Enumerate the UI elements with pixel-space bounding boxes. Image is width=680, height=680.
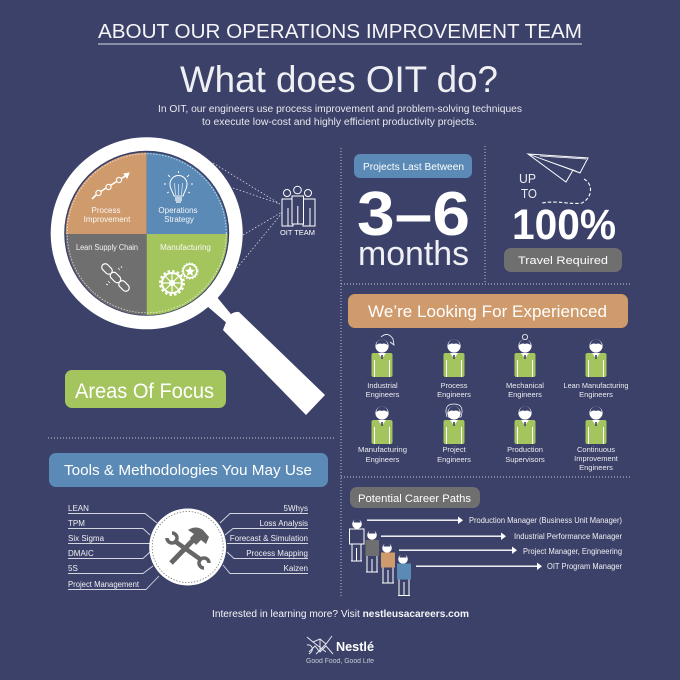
text: up to: TO (521, 186, 537, 201)
text: up to (519, 171, 537, 201)
icon: OIT team (280, 186, 315, 237)
quadrant: manufacturing: Manufacturing (160, 243, 211, 252)
icon: OIT team: OIT TEAM (280, 228, 315, 237)
panel: travel (504, 154, 622, 272)
text: up to: UP (519, 171, 536, 186)
right tool labels: 5Whys (284, 504, 308, 513)
career labels: Production Manager (Business Unit Manager) (469, 516, 622, 525)
quadrant: process improvement (66, 152, 147, 234)
footer call to action: Interested in learning more? Visit nestleusacareers.com (212, 609, 469, 620)
quadrant: lean supply chain (66, 234, 147, 315)
panel: tools and methodologies (49, 453, 328, 590)
right tool labels: Process Mapping (246, 549, 308, 558)
right tool labels: Forecast & Simulation (230, 534, 308, 543)
right tool labels: Loss Analysis (260, 519, 308, 528)
engineer: production supervisors: Supervisors (505, 455, 545, 464)
engineer: lean manufacturing: Engineers (579, 390, 613, 399)
left tool labels: Project Management (68, 580, 140, 589)
heading pill: looking for experienced: We’re Looking For Experienced (368, 302, 607, 321)
icon: paper plane (528, 154, 591, 203)
engineer: project: Project (442, 445, 467, 454)
pill: projects last between: Projects Last Between (363, 162, 464, 173)
engineer: manufacturing: Manufacturing (358, 445, 407, 454)
engineer: lean manufacturing (564, 339, 628, 399)
career labels: OIT Program Manager (547, 562, 622, 571)
title: ABOUT OUR OPERATIONS IMPROVEMENT TEAM (98, 21, 582, 43)
career labels (469, 516, 622, 571)
quadrant: manufacturing (147, 234, 228, 315)
panel: career paths (350, 487, 622, 596)
heading pill: tools (49, 453, 328, 487)
left tool labels (68, 504, 140, 589)
number: 100%: 100% (512, 201, 616, 249)
intro text: In OIT, our engineers use process improvement and problem-solving techniques (158, 104, 522, 115)
heading pill: looking for experienced (348, 294, 628, 328)
number: 3-6: 3–6 (357, 180, 470, 249)
engineer: mechanical (506, 334, 544, 399)
engineer: industrial: Industrial (367, 381, 398, 390)
label: areas of focus (65, 370, 226, 408)
heading pill: tools: Tools & Methodologies You May Use (64, 462, 312, 479)
icon: rising chart line (92, 173, 129, 199)
Nestlé logo: Good Food, Good Life (306, 658, 374, 665)
heading: What does OIT do: What does OIT do? (180, 59, 498, 100)
icon: nest (307, 636, 333, 654)
dotted connectors to OIT team (213, 163, 282, 268)
engineer: project: Engineers (437, 455, 471, 464)
text: months: months (358, 235, 469, 273)
engineer: mechanical: Engineers (508, 390, 542, 399)
panel: project duration (354, 154, 472, 273)
intro text (158, 104, 522, 128)
lens ring (51, 137, 243, 329)
icon: light bulb (164, 171, 193, 202)
quadrant: operations strategy: Operations (158, 206, 198, 215)
career arrows (367, 516, 542, 570)
right tool labels: Kaizen (284, 564, 308, 573)
engineer: production supervisors: Production (507, 445, 543, 454)
magnifier handle (207, 296, 325, 415)
left tool labels: Six Sigma (68, 534, 105, 543)
career labels: Project Manager, Engineering (523, 547, 622, 556)
engineer: continuous improvement: Engineers (579, 463, 613, 472)
engineer: manufacturing: Engineers (366, 455, 400, 464)
engineer: industrial: Engineers (366, 390, 400, 399)
Nestlé logo (306, 636, 374, 665)
label: areas of focus: Areas Of Focus (75, 380, 214, 403)
engineer: lean manufacturing: Lean Manufacturing (564, 381, 628, 390)
engineer: production supervisors (505, 406, 545, 464)
icon: chain links (100, 262, 131, 293)
engineer: continuous improvement: Continuous (577, 445, 615, 454)
magnifying glass with areas of focus (51, 137, 325, 415)
engineer: manufacturing (358, 406, 407, 464)
icon: career ladder people (350, 519, 411, 596)
career labels: Industrial Performance Manager (514, 532, 622, 541)
left tool labels: TPM (68, 519, 85, 528)
panel: engineers we look for (348, 294, 628, 472)
icon: crossed wrench and hammer (149, 508, 226, 586)
intro text: to execute low-cost and highly efficient productivity projects. (202, 117, 477, 128)
engineer: process: Process (440, 381, 468, 390)
quadrant: process improvement: Process (92, 206, 120, 215)
quadrant: operations strategy: Strategy (164, 215, 194, 224)
left tool labels: LEAN (68, 504, 89, 513)
quadrant: lean supply chain: Lean Supply Chain (76, 243, 138, 252)
engineer: mechanical: Mechanical (506, 381, 544, 390)
leader lines (68, 514, 308, 590)
engineer: process (437, 339, 471, 399)
heading pill: career paths: Potential Career Paths (358, 493, 472, 505)
engineer: continuous improvement (574, 406, 619, 472)
Nestlé logo: Nestlé (336, 639, 374, 654)
left tool labels: DMAIC (68, 549, 94, 558)
engineer: continuous improvement: Improvement (574, 454, 619, 463)
engineer: process: Engineers (437, 390, 471, 399)
quadrant: process improvement: Improvement (84, 215, 131, 224)
engineer: project (437, 404, 471, 464)
heading pill: career paths (350, 487, 480, 508)
engineer: industrial (366, 334, 400, 399)
pill: travel required: Travel Required (518, 255, 608, 267)
right tool labels (230, 504, 308, 573)
quadrant: operations strategy (147, 152, 228, 234)
left tool labels: 5S (68, 564, 78, 573)
icon: gears (160, 263, 198, 295)
